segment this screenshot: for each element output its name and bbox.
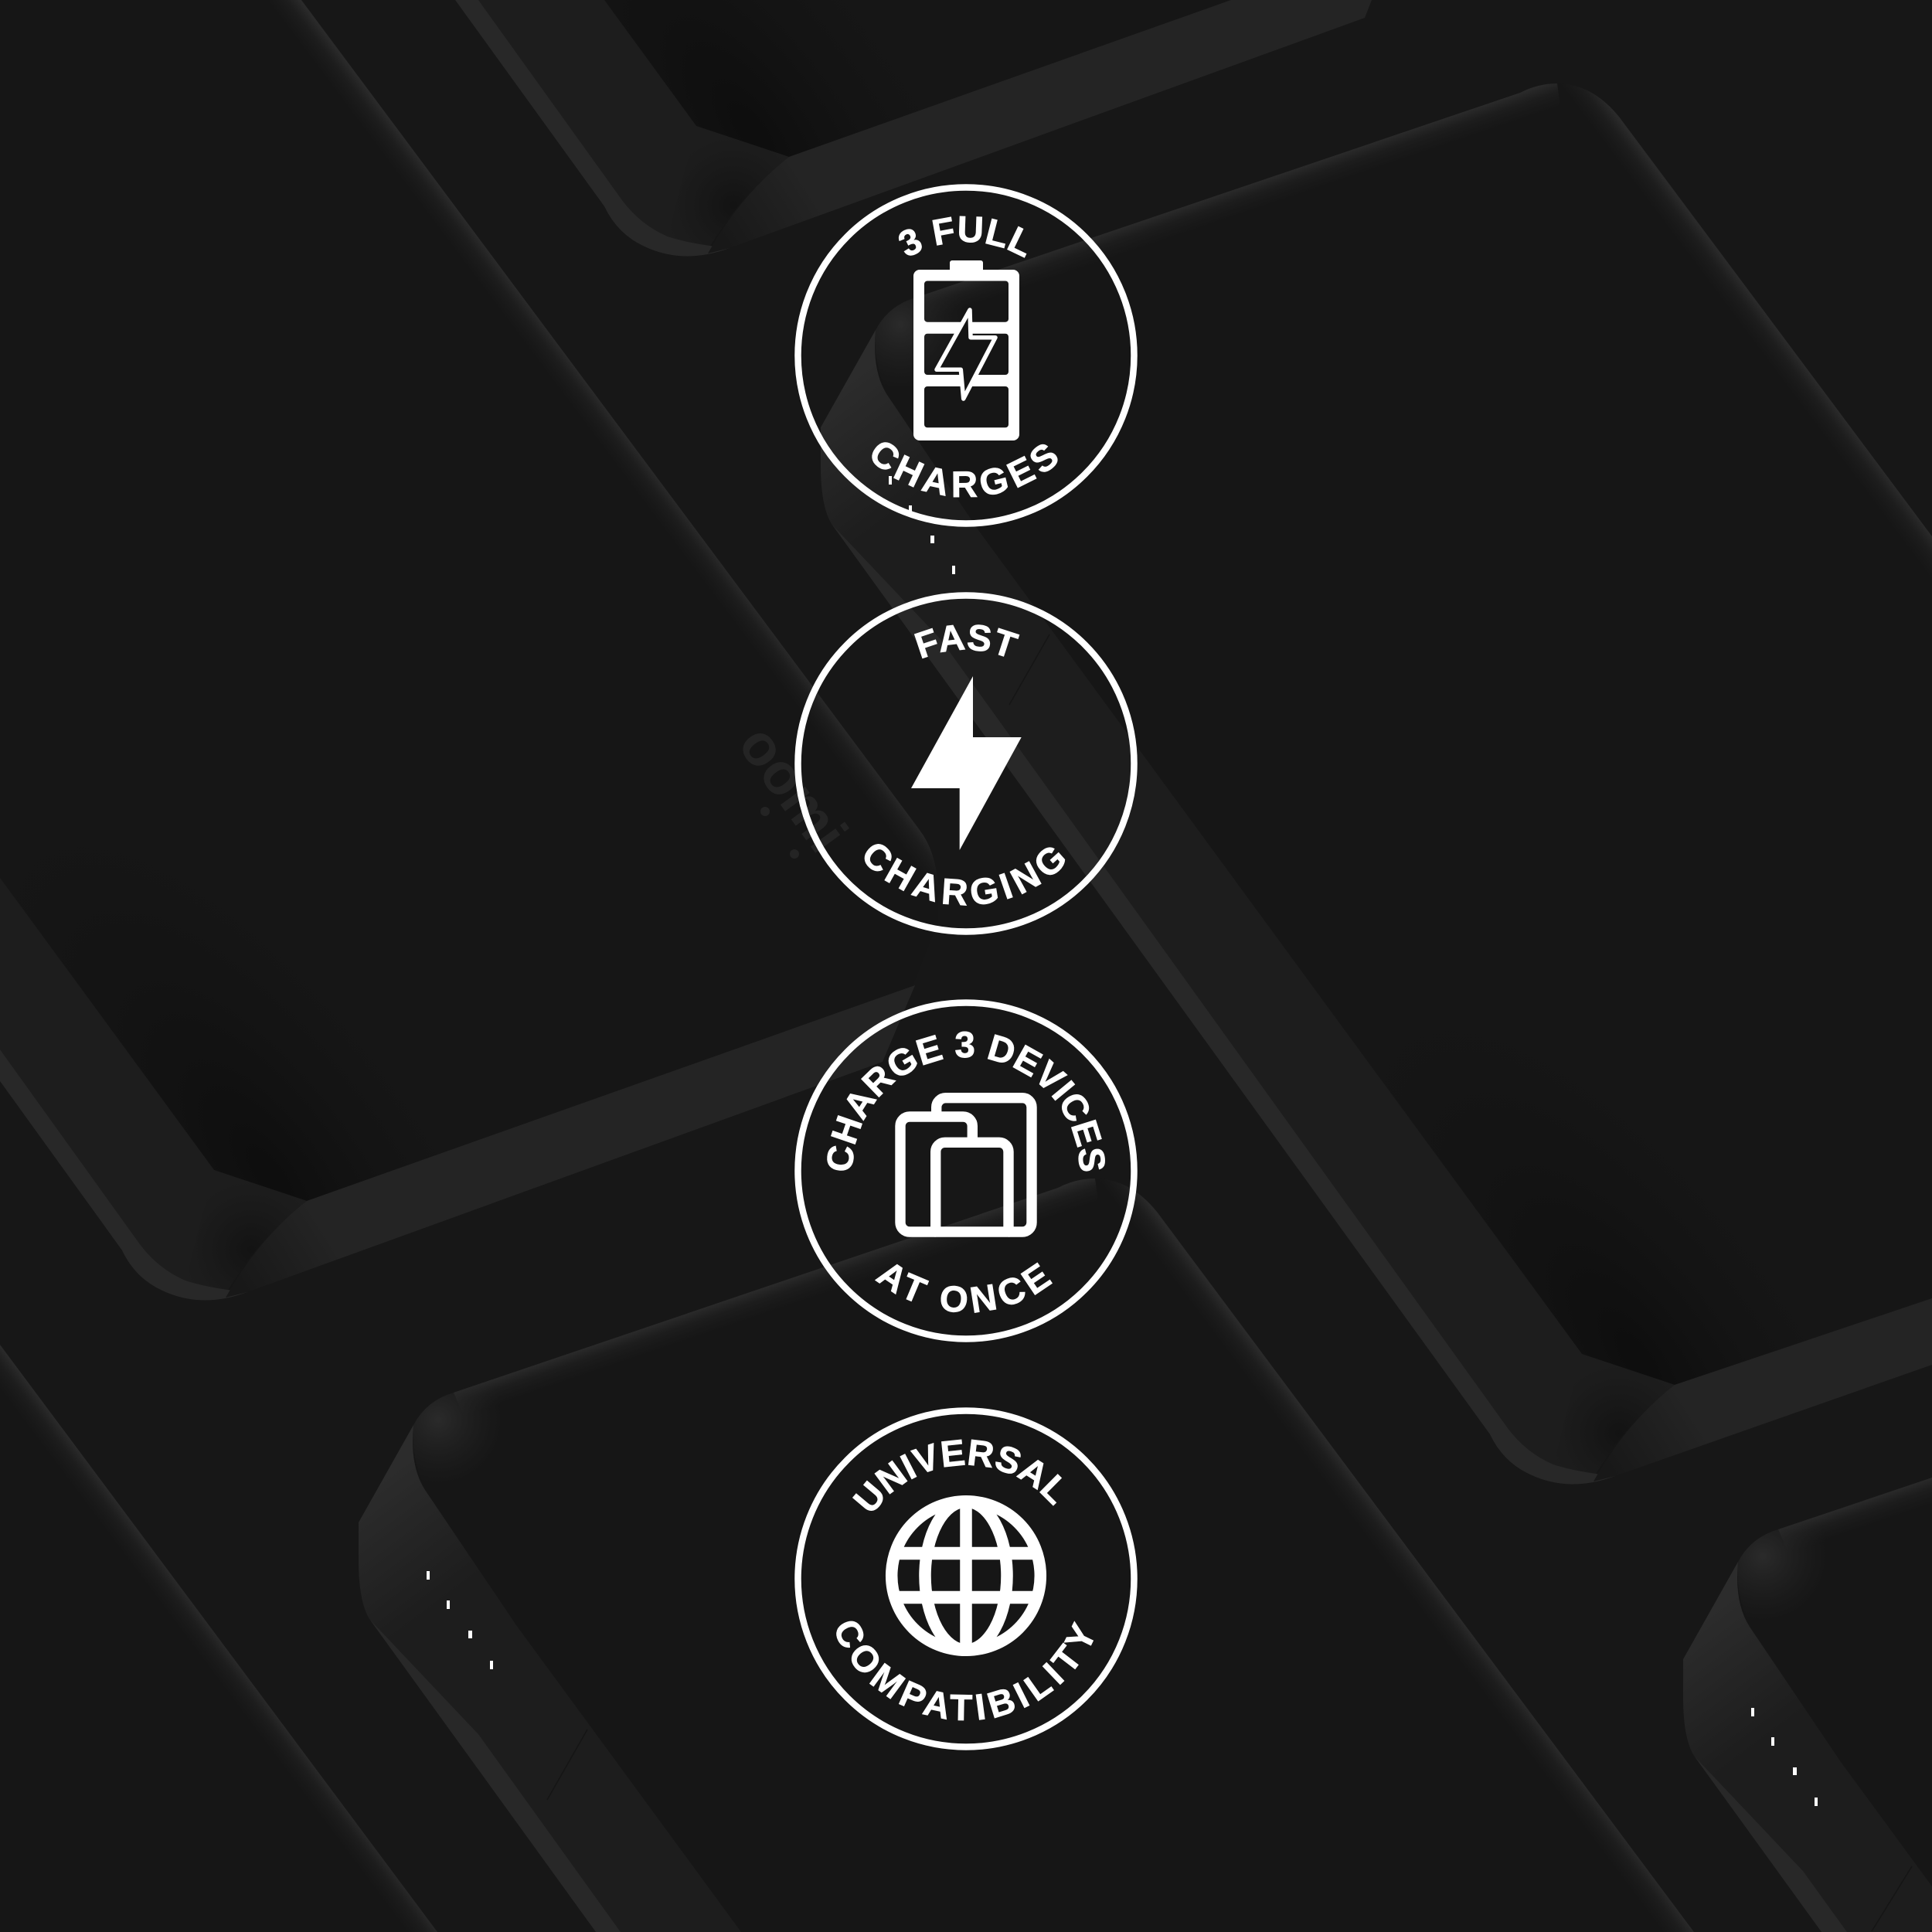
icon: lightning bolt	[911, 676, 1022, 850]
power bank: top centre	[455, 0, 1372, 257]
label: COMPATIBILITY: COMPATIBILITY	[836, 1621, 1094, 1720]
icon: three overlapping devices	[900, 1098, 1032, 1232]
badge: fast charging	[794, 592, 1138, 935]
label: AT ONCE: AT ONCE	[875, 1263, 1053, 1313]
power bank: left large	[0, 0, 938, 1301]
heading: FAST: FAST	[913, 624, 1020, 658]
heading: 3 FULL: 3 FULL	[898, 216, 1026, 258]
badge: charge 3 devices at once	[794, 999, 1138, 1342]
badge: universal compatibility	[794, 1407, 1138, 1750]
badge: 3 full charges	[794, 184, 1138, 527]
heading: UNIVERSAL: UNIVERSAL	[852, 1439, 1062, 1511]
power bank: bottom right	[1683, 1478, 1932, 1932]
power bank: right large	[821, 83, 1932, 1485]
power bank: bottom left edge	[0, 1345, 437, 1932]
faint logo on power bank: oomi	[726, 713, 860, 863]
label: CHARGING: CHARGING	[864, 844, 1065, 906]
icon: globe	[892, 1502, 1040, 1650]
heading: CHARGE 3 DEVICES: CHARGE 3 DEVICES	[827, 1031, 1105, 1172]
label: CHARGES: CHARGES	[872, 442, 1058, 498]
power bank: bottom centre	[359, 1179, 1694, 1932]
icon: battery with bolt	[913, 260, 1019, 440]
